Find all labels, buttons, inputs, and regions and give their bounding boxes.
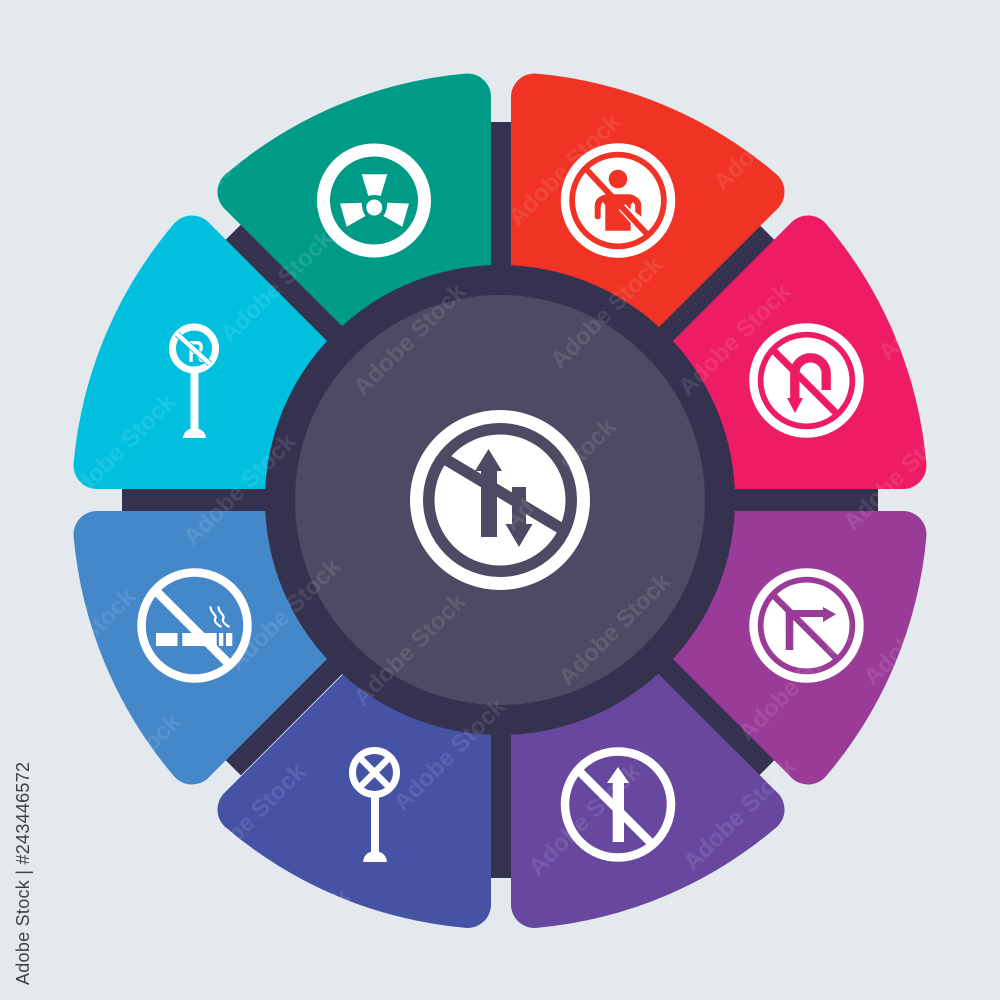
watermark text: Adobe Stock [873,243,997,366]
watermark text: Adobe Stock [388,693,512,816]
watermark text: Adobe Stock [348,588,472,711]
watermark text: Adobe Stock [858,568,982,691]
watermark text: Adobe Stock [58,388,182,511]
watermark text: Adobe Stock [18,583,142,706]
icon: cross sign on post [352,750,396,862]
panel: green segment, radiation [217,74,491,346]
watermark text: Adobe [924,919,996,991]
icon: no smoking sign [142,572,248,678]
watermark text: Stock [72,927,138,992]
watermark text: Adobe [414,919,486,991]
watermark text: Adobe Stock [673,278,797,401]
watermark text: Adobe Stock [678,753,802,876]
icon: no overtaking sign in the centre [416,416,584,584]
icon: no straight ahead sign [565,752,671,858]
stock image id: Adobe Stock | #243446572 [13,762,33,985]
spokes: dark cross bars behind the segments [122,122,878,878]
icon: no right turn sign [754,572,860,678]
panel: indigo segment, crossing sign post [217,656,491,928]
watermark text: Adobe Stock [708,73,832,196]
watermark text: Adobe Stock [545,251,669,374]
watermark text: Adobe Stock [498,413,622,536]
centre hub: dark ring [265,265,735,735]
watermark text: Adobe Stock [553,568,677,691]
panel: blue segment, no smoking [74,511,346,785]
watermark text: Adobe Stock [503,108,627,231]
icon: no person sign [565,148,671,254]
watermark text: Stock [2,2,68,67]
panel: purple segment, no right turn [654,511,926,785]
panel: pink segment, no U-turn [654,215,926,489]
watermark text: Adobe Stock [223,553,347,676]
centre hub: inner disc [295,295,705,705]
panel: cyan segment, no parking post [74,215,346,489]
icon: no parking sign on post: R [188,334,204,369]
watermark text: Adobe Stock [41,58,165,181]
watermark text: Adobe Stock [833,93,957,216]
watermark text: Adobe Stock [178,428,302,551]
watermark text: Adobe Stock [188,758,312,881]
watermark text: Adobe Stock [523,758,647,881]
watermark text: Adobe Stock [733,623,857,746]
watermark text: Adobe Stock [215,225,339,348]
panel: violet segment, no straight ahead [511,656,785,928]
icon: radiation sign [324,150,424,251]
watermark text: Adobe Stock [348,278,472,401]
watermark text: Stock [752,927,818,992]
watermark text: Adobe Stock [853,768,977,891]
watermark text: Adobe Stock [63,708,187,831]
watermark text: Adobe Stock [838,413,962,536]
icon: no parking sign on post [172,327,216,438]
panel: red segment, no person [511,74,785,346]
icon: no U-turn sign [754,328,860,434]
watermark text: Stock [192,137,258,202]
